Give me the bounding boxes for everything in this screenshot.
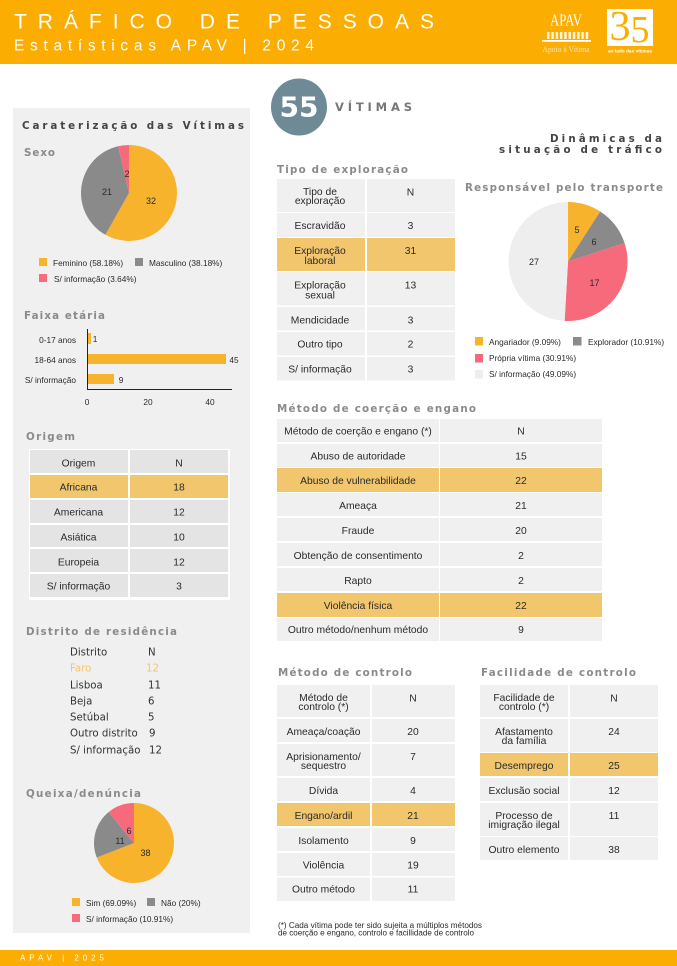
- table: método de controlo: sequestro: [301, 761, 346, 772]
- table: facilidade de controlo: 12: [608, 786, 620, 797]
- table: origem: 12: [173, 558, 185, 568]
- table: distrito de residência: Outro distrito: [70, 728, 138, 740]
- heading: caraterização: Caraterização das Vítimas: [22, 120, 244, 132]
- table: origem: Europeia: [58, 558, 99, 568]
- bar chart: faixa etária: 20: [143, 397, 153, 407]
- table: método de controlo: 19: [407, 860, 419, 872]
- heading: origem: Origem: [26, 431, 75, 443]
- table: origem: S/ informação: [47, 582, 111, 592]
- heading: distrito de residência: Distrito de residência: [26, 626, 177, 638]
- table: distrito de residência: Beja: [70, 696, 92, 708]
- table: tipo de exploração: 3: [408, 221, 414, 232]
- pie chart: responsável pelo transporte: [509, 202, 628, 321]
- logo: 35 anos: 3: [610, 4, 630, 50]
- table: método de coerção e engano: 15: [515, 452, 527, 462]
- table: origem: Asiática: [60, 532, 97, 544]
- heading: método de coerção e engano: Método de coerção e engano: [277, 403, 476, 415]
- heading: dinâmicas da situação de tráfico: situação de tráfico: [499, 144, 662, 156]
- table: facilidade de controlo: 24: [608, 727, 620, 738]
- pie chart: responsável pelo transporte: 17: [589, 278, 600, 288]
- table: facilidade de controlo: 11: [609, 811, 620, 822]
- table: tipo de exploração: 3: [408, 316, 414, 326]
- table: facilidade de controlo: da família: [502, 736, 547, 747]
- table: método de coerção e engano: 22: [515, 601, 527, 612]
- table: método de controlo: 11: [408, 884, 419, 896]
- table: método de coerção e engano: Fraude: [342, 526, 375, 537]
- legend: queixa/denúncia: [72, 898, 201, 924]
- heading: método de controlo: Método de controlo: [278, 667, 412, 679]
- table: método de controlo: 4: [410, 786, 416, 797]
- table: distrito de residência: Lisboa: [70, 680, 103, 692]
- logo: APAV: Apoio à Vítima: [542, 44, 590, 54]
- logo: 35 anos: 5: [630, 9, 650, 51]
- table: tipo de exploração: N: [407, 188, 414, 198]
- heading: dinâmicas da situação de tráfico: Dinâmicas da: [550, 133, 662, 145]
- footer band: APAV | 2025: [20, 954, 105, 962]
- panel: caraterização das vítimas: [13, 108, 250, 933]
- bar chart: faixa etária: 18-64 anos: [34, 355, 76, 365]
- table: tipo de exploração: 13: [405, 280, 416, 292]
- bar chart: faixa etária: 1: [93, 334, 98, 344]
- table: método de controlo: [277, 685, 455, 901]
- table: distrito de residência: [70, 648, 162, 756]
- table: distrito de residência: Setúbal: [70, 712, 109, 724]
- table: método de coerção e engano: 9: [518, 625, 524, 636]
- bar chart: faixa etária: 9: [119, 375, 124, 385]
- table: tipo de exploração: 31: [405, 246, 416, 257]
- total de vítimas: 55: [280, 90, 318, 124]
- table: distrito de residência: S/ informação: [70, 746, 140, 756]
- table: facilidade de controlo: Desemprego: [495, 761, 554, 772]
- table: facilidade de controlo: Exclusão social: [489, 786, 559, 797]
- table: tipo de exploração: Exploração: [294, 246, 346, 257]
- table: distrito de residência: 11: [148, 680, 161, 692]
- table: tipo de exploração: Mendicidade: [291, 316, 349, 326]
- table: método de controlo: Isolamento: [298, 836, 349, 847]
- heading: facilidade de controlo: Facilidade de controlo: [481, 667, 636, 679]
- legend: queixa/denúncia: S/ informação (10.91%): [86, 914, 173, 924]
- table: método de coerção e engano: [277, 419, 602, 641]
- legend: responsável pelo transporte: S/ informação (49.09%): [489, 369, 576, 379]
- table: método de coerção e engano: Violência física: [324, 601, 393, 612]
- table: método de coerção e engano: Método de coerção e engano (*): [284, 426, 432, 438]
- legend: responsável pelo transporte: Explorador (10.91%): [588, 337, 664, 347]
- legend: sexo: Masculino (38.18%): [149, 258, 223, 268]
- table: distrito de residência: 12: [149, 746, 162, 756]
- bar chart: faixa etária: 0-17 anos: [39, 335, 76, 345]
- table: tipo de exploração: [277, 179, 455, 380]
- legend: queixa/denúncia: Não (20%): [161, 898, 201, 908]
- table: método de controlo: Engano/ardil: [295, 811, 352, 822]
- legend: sexo: Feminino (58.18%): [53, 258, 123, 268]
- legend: responsável pelo transporte: [475, 337, 664, 379]
- table: método de controlo: controlo (*): [298, 702, 349, 713]
- table: facilidade de controlo: imigração ilegal: [488, 820, 560, 831]
- table: tipo de exploração: laboral: [305, 256, 335, 267]
- table: facilidade de controlo: [480, 685, 658, 860]
- logo: APAV: APAV: [550, 10, 583, 30]
- table: origem: Origem: [62, 458, 95, 470]
- heading: tipo de exploração: Tipo de exploração: [277, 164, 408, 176]
- table: facilidade de controlo: Afastamento: [495, 727, 553, 738]
- table: método de coerção e engano: 2: [518, 576, 524, 587]
- logo: 35 anos: ao lado das vítimas: [608, 48, 653, 54]
- table: método de coerção e engano: Outro método/nenhum método: [288, 625, 428, 636]
- table: método de controlo: Violência: [303, 860, 345, 872]
- table: distrito de residência: 9: [149, 728, 155, 740]
- table: distrito de residência: Faro: [70, 664, 91, 674]
- table: tipo de exploração: Escravidão: [295, 221, 346, 232]
- pie chart: queixa/denúncia: [94, 803, 174, 883]
- table: tipo de exploração: Tipo de: [303, 187, 337, 198]
- table: origem: 18: [173, 482, 185, 494]
- table: facilidade de controlo: controlo (*): [499, 702, 549, 713]
- table: origem: N: [175, 458, 183, 470]
- pie chart: sexo: 21: [102, 187, 112, 197]
- table: origem: Africana: [60, 482, 98, 494]
- table: distrito de residência: 5: [148, 712, 154, 724]
- title: TRÁFICO DE PESSOAS: [14, 10, 434, 34]
- logo: APAV: [542, 10, 591, 54]
- header band: [0, 0, 677, 64]
- heading: sexo: Sexo: [24, 147, 55, 159]
- table: método de coerção e engano: 21: [515, 501, 527, 512]
- subtitle: Estatísticas APAV | 2024: [14, 38, 314, 54]
- table: origem: 10: [173, 532, 185, 544]
- total de vítimas: [271, 78, 412, 136]
- table: origem: Americana: [54, 508, 103, 518]
- table: método de controlo: Ameaça/coação: [287, 727, 361, 738]
- table: distrito de residência: Distrito: [70, 648, 107, 658]
- total de vítimas: VÍTIMAS: [335, 99, 412, 114]
- table: método de coerção e engano: Ameaça: [339, 501, 377, 512]
- heading: responsável pelo transporte: Responsável pelo transporte: [465, 182, 663, 194]
- bar chart: faixa etária: S/ informação: [25, 375, 76, 385]
- footer band: [0, 950, 677, 966]
- table: facilidade de controlo: 38: [608, 845, 620, 856]
- table: tipo de exploração: 3: [408, 364, 414, 376]
- heading: dinâmicas da situação de tráfico: [499, 133, 662, 156]
- pie chart: responsável pelo transporte: 5: [574, 225, 580, 235]
- pie chart: queixa/denúncia: 38: [140, 848, 151, 858]
- table: tipo de exploração: S/ informação: [288, 364, 352, 376]
- pie chart: sexo: 32: [146, 196, 156, 206]
- table: método de coerção e engano: N: [517, 426, 525, 438]
- legend: responsável pelo transporte: Angariador (9.09%): [489, 337, 561, 347]
- bar chart: faixa etária: 40: [205, 397, 215, 407]
- table: facilidade de controlo: 25: [608, 761, 620, 772]
- heading: queixa/denúncia: Queixa/denúncia: [26, 788, 141, 800]
- table: método de controlo: 9: [410, 836, 416, 847]
- bar chart: faixa etária: [25, 329, 239, 407]
- table: método de controlo: Aprisionamento/: [286, 752, 361, 763]
- logo: 35 anos: [607, 4, 653, 54]
- pie chart: sexo: 2: [124, 169, 130, 179]
- table: origem: [29, 449, 230, 600]
- table: método de controlo: 20: [407, 727, 419, 738]
- table: método de controlo: N: [409, 694, 417, 704]
- legend: sexo: S/ informação (3.64%): [54, 274, 137, 284]
- table: método de coerção e engano: Obtenção de consentimento: [294, 551, 423, 562]
- table: distrito de residência: N: [148, 648, 156, 658]
- legend: queixa/denúncia: Sim (69.09%): [86, 898, 136, 908]
- table: método de controlo: Outro método: [292, 884, 355, 896]
- bar chart: faixa etária: 45: [229, 355, 239, 365]
- table: facilidade de controlo: Facilidade de: [493, 693, 555, 704]
- table: método de coerção e engano: Rapto: [344, 576, 372, 587]
- table: método de coerção e engano: Abuso de autoridade: [310, 452, 406, 462]
- table: facilidade de controlo: N: [610, 694, 618, 704]
- pie chart: queixa/denúncia: 11: [115, 836, 125, 846]
- table: método de controlo: Dívida: [309, 786, 338, 797]
- table: distrito de residência: 12: [146, 664, 159, 674]
- table: método de coerção e engano: 20: [515, 526, 527, 537]
- footnote: [278, 921, 482, 938]
- table: método de controlo: 21: [407, 811, 419, 822]
- table: origem: 12: [173, 508, 185, 518]
- pie chart: queixa/denúncia: 6: [126, 826, 132, 836]
- table: tipo de exploração: exploração: [295, 196, 345, 207]
- table: facilidade de controlo: Outro elemento: [489, 845, 560, 856]
- footnote: (*) Cada vítima pode ter sido sujeita a múltiplos métodos: [278, 921, 482, 930]
- table: tipo de exploração: Outro tipo: [297, 340, 343, 350]
- table: tipo de exploração: sexual: [305, 290, 335, 302]
- table: método de controlo: 7: [410, 752, 416, 763]
- table: método de coerção e engano: 2: [518, 551, 524, 562]
- bar chart: faixa etária: 0: [85, 397, 90, 407]
- heading: faixa etária: Faixa etária: [24, 310, 105, 322]
- pie chart: responsável pelo transporte: 6: [591, 237, 597, 247]
- table: tipo de exploração: Exploração: [294, 280, 346, 292]
- table: distrito de residência: 6: [148, 696, 154, 708]
- legend: sexo: [39, 258, 223, 284]
- pie chart: sexo: [81, 145, 177, 241]
- table: tipo de exploração: 2: [408, 340, 414, 350]
- table: método de coerção e engano: Abuso de vulnerabilidade: [300, 476, 416, 487]
- footnote: de coerção e engano, controlo e facillidade de controlo: [278, 928, 475, 938]
- legend: responsável pelo transporte: Própria vítima (30.91%): [489, 353, 576, 363]
- table: método de controlo: Método de: [299, 693, 348, 704]
- pie chart: responsável pelo transporte: 27: [529, 257, 539, 267]
- table: facilidade de controlo: Processo de: [495, 811, 553, 822]
- table: origem: 3: [176, 582, 182, 592]
- table: método de coerção e engano: 22: [515, 476, 527, 487]
